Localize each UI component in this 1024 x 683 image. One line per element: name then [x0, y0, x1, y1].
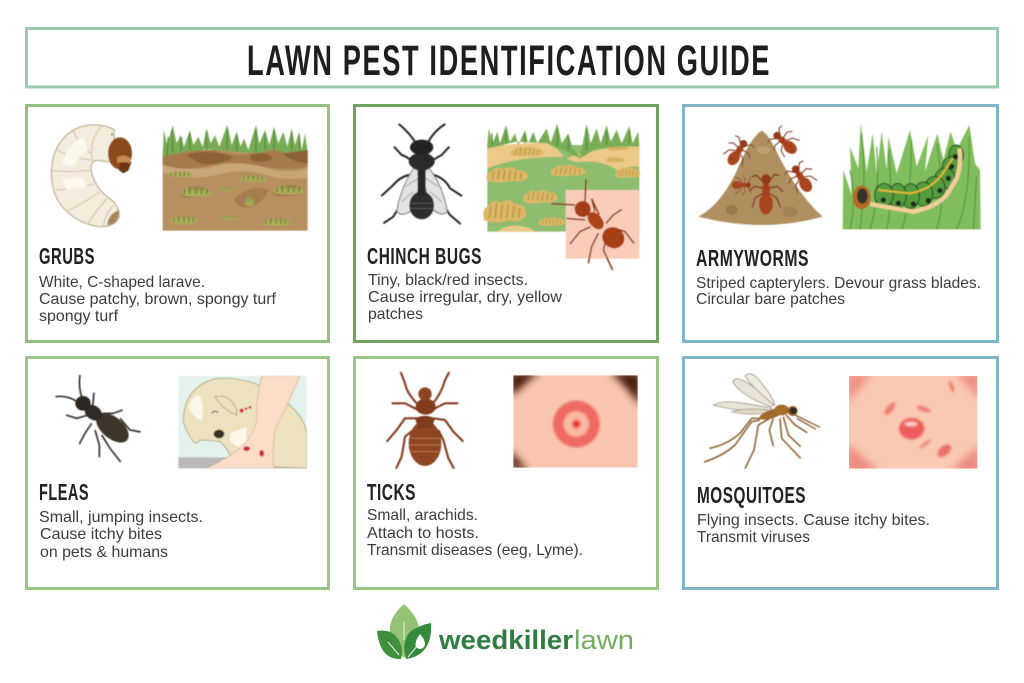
icon: tick: [387, 372, 463, 469]
panel: ticks: [354, 358, 658, 588]
description: armyworms: Circular bare patches: [696, 291, 845, 308]
description: armyworms: [696, 275, 981, 308]
panel: chinch bugs: [354, 106, 658, 342]
description: grubs: White, C-shaped larave.: [39, 274, 205, 291]
description: grubs: [39, 274, 277, 325]
icon: ant mound: [698, 123, 823, 225]
description: mosquitoes: [697, 512, 930, 546]
illustration: bullseye rash: [513, 375, 638, 468]
description: mosquitoes: Transmit viruses: [697, 529, 810, 546]
description: ticks: Transmit diseases (eeg, Lyme).: [367, 542, 583, 559]
title banner: [26, 28, 998, 87]
description: chinch bugs: Cause irregular, dry, yellow: [368, 289, 562, 306]
description: ticks: [367, 507, 583, 559]
wordmark: weedkiller: [438, 625, 573, 655]
description: chinch bugs: [368, 272, 562, 323]
wordmark light: lawn: [574, 625, 634, 655]
description: fleas: on pets & humans: [40, 544, 168, 561]
panel: armyworms: [684, 106, 998, 342]
heading: chinch bugs: CHINCH BUGS: [367, 243, 482, 269]
illustration: lawn with yellow patches and red ant: [483, 123, 640, 270]
icon: white grub larva: [51, 125, 132, 227]
description: grubs: Cause patchy, brown, spongy turf: [39, 291, 277, 308]
icon: flea: [55, 375, 141, 462]
icon: three leaves with droplet: [377, 604, 431, 659]
panel: fleas: [26, 358, 328, 588]
heading: armyworms: ARMYWORMS: [696, 245, 809, 271]
description: chinch bugs: patches: [368, 306, 423, 323]
description: ticks: Small, arachids.: [367, 507, 478, 524]
illustration: mosquito bite rash: [847, 373, 980, 472]
description: grubs: spongy turf: [39, 308, 119, 325]
description: fleas: Small, jumping insects.: [39, 509, 203, 526]
description: mosquitoes: Flying insects. Cause itchy bites.: [697, 512, 930, 529]
description: fleas: Cause itchy bites: [40, 526, 162, 543]
description: armyworms: Striped capterylers. Devour grass blades.: [696, 275, 981, 292]
description: chinch bugs: Tiny, black/red insects.: [368, 272, 528, 289]
panel: grubs: [26, 106, 328, 342]
heading: fleas: FLEAS: [39, 479, 89, 505]
illustration: soil with brown patches: [163, 125, 308, 231]
illustration: armyworm caterpillar on grass: [843, 123, 981, 229]
heading: mosquitoes: MOSQUITOES: [697, 482, 806, 508]
heading: ticks: TICKS: [367, 479, 416, 505]
panel: mosquitoes: [684, 358, 998, 588]
icon: mosquito: [704, 374, 820, 469]
illustration: dog and bitten ankle: [178, 376, 307, 468]
heading: grubs: GRUBS: [39, 243, 95, 269]
logo: weedkillerlawn: [377, 604, 634, 659]
description: ticks: Attach to hosts.: [367, 525, 479, 542]
icon: black chinch bug: [381, 124, 462, 224]
description: fleas: [39, 509, 203, 561]
